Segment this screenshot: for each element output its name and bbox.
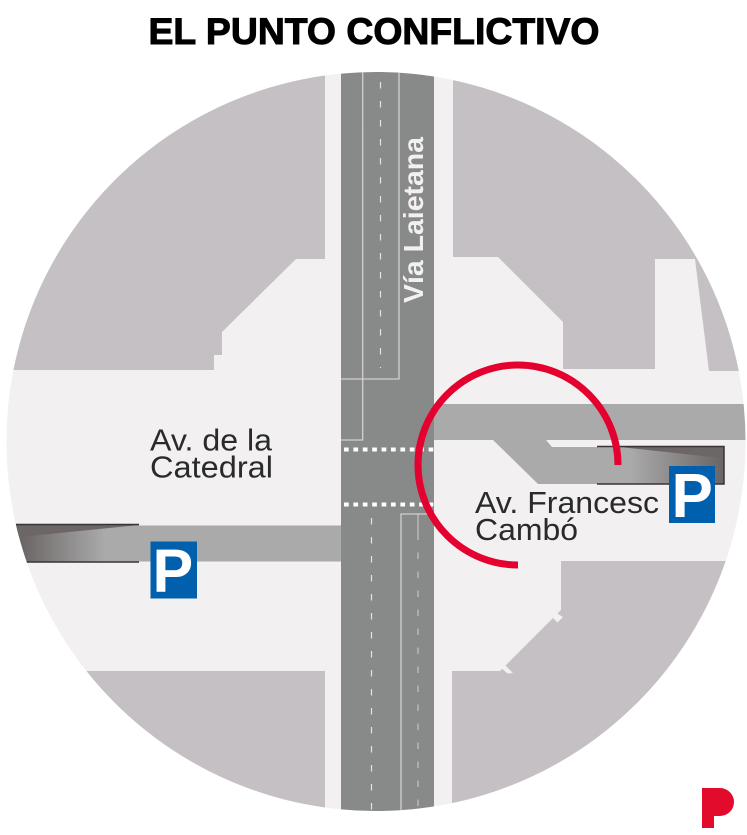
building block: top left [0, 60, 325, 370]
street label: Av. de la Catedral: Av. de la [150, 422, 273, 458]
road: Av. Francesc Cambó [434, 404, 747, 484]
parking entrance: left [10, 524, 139, 562]
road: Av. de la Catedral [10, 524, 341, 562]
parking entrance: right [597, 446, 724, 484]
street label: Via Laietana: Vía Laietana [398, 136, 429, 303]
logo: red P [702, 788, 734, 828]
parking sign: left: P [152, 537, 193, 605]
parking sign: right: P [672, 462, 713, 531]
street label: Av. Francesc Cambó [475, 492, 658, 540]
crosswalk: south [344, 502, 434, 506]
street label: Av. de la Catedral: Catedral [150, 450, 273, 484]
crosswalk: north [344, 448, 434, 452]
street label: Av. Francesc Cambó: Cambó [475, 512, 578, 547]
road: Via Laietana [341, 60, 434, 820]
red highlight arc [418, 365, 618, 565]
building block: bottom left [86, 671, 325, 808]
street label: Av. Francesc Cambó: Av. Francesc [475, 485, 659, 520]
title: EL PUNTO CONFLICTIVO [148, 10, 600, 52]
building block: top right [453, 60, 747, 371]
building block: bottom right [452, 561, 726, 803]
street label: Av. de la Catedral [150, 428, 272, 478]
